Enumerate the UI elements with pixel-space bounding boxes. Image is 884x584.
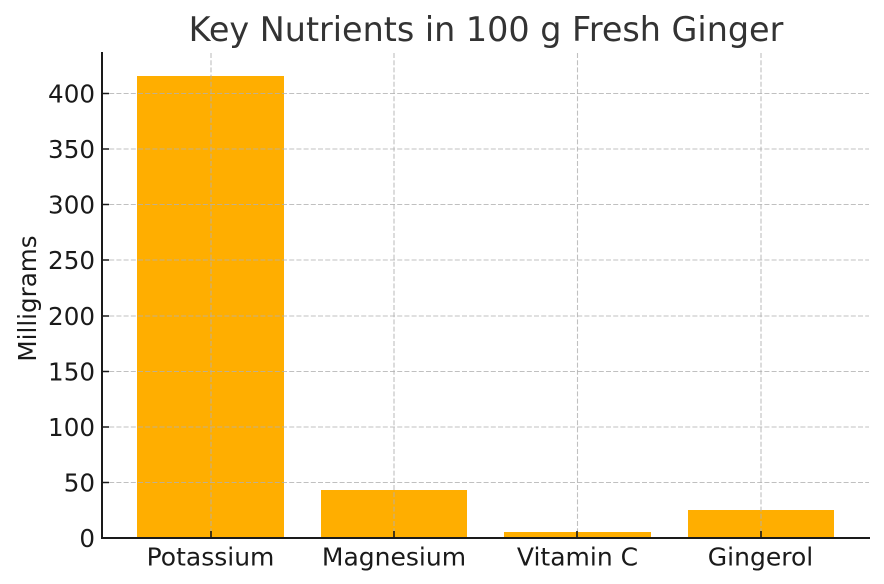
y tick labels: 0	[79, 524, 95, 553]
y tick labels: 250	[48, 246, 95, 275]
x tick labels: Magnesium	[322, 542, 466, 572]
y tick labels: 400	[48, 80, 95, 108]
y axis	[48, 52, 870, 553]
bar: Vitamin C	[504, 532, 651, 538]
y tick labels	[48, 80, 95, 553]
x tick labels: Gingerol	[708, 542, 813, 572]
x tick labels: Vitamin C	[517, 542, 638, 572]
y axis label: Milligrams	[13, 235, 42, 362]
x tick labels	[147, 542, 813, 572]
bar: Magnesium	[321, 490, 467, 538]
bar: Potassium	[137, 76, 284, 538]
x tick labels: Potassium	[147, 542, 274, 572]
y tick labels: 200	[48, 302, 95, 331]
y tick labels: 300	[48, 190, 95, 220]
y tick labels: 150	[48, 358, 95, 386]
y tick labels: 50	[64, 468, 95, 498]
bar: Gingerol	[688, 510, 834, 538]
y tick labels: 100	[48, 413, 95, 442]
title: Key Nutrients in 100 g Fresh Ginger	[189, 10, 784, 49]
y tick labels: 350	[48, 135, 95, 164]
